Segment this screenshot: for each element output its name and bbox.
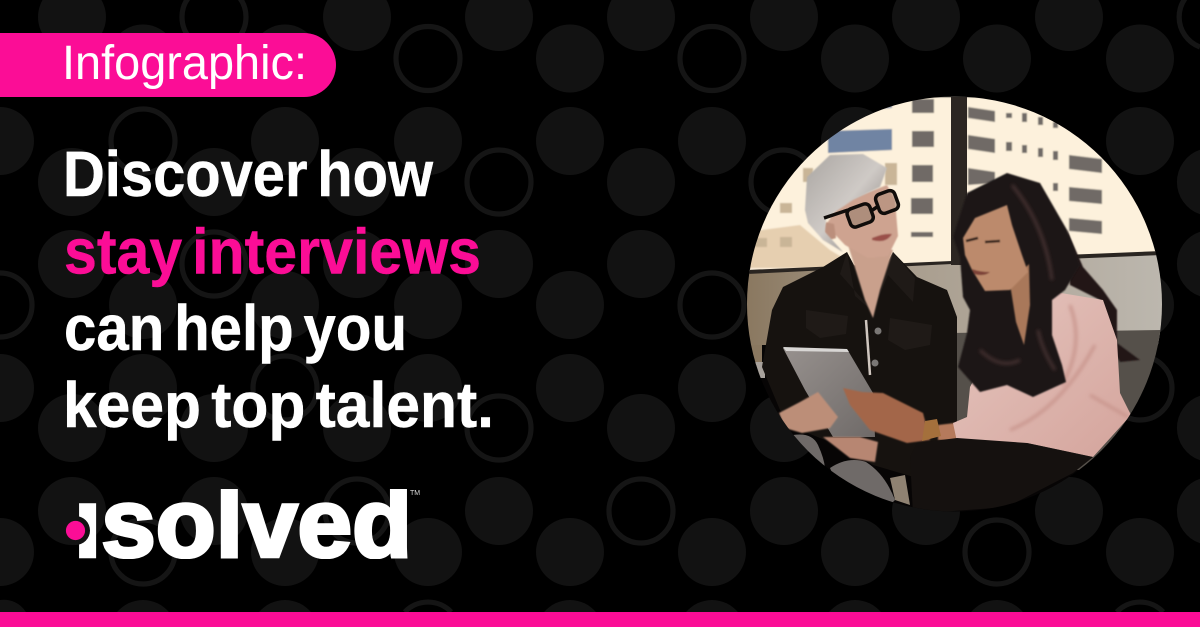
headline [63,138,494,441]
window with city buildings [747,96,1162,272]
blouse folds [1010,305,1128,430]
logo pink dot [66,521,85,540]
woman right: hair strand behind shoulder [1067,230,1140,362]
headline line 1: Discover how [63,138,433,210]
headline line 2: highlighted: stay interviews [64,216,481,288]
photo: two women reviewing a tablet [747,96,1162,514]
tablet [783,347,875,437]
woman right: black pants [910,438,1093,514]
label text: Infographic: [62,37,307,90]
isolved logo [66,489,420,559]
headline line 3: can help you [64,292,407,364]
glasses [824,189,900,229]
logo wordmark: isolved [74,468,412,578]
woman left: silver hair [805,154,887,252]
woman right: neck and face [963,205,1030,345]
watch [922,419,941,441]
trademark: TM [410,490,420,497]
woman right: dark hair [953,173,1080,397]
headline line 4: keep top talent. [63,369,494,441]
pink bottom bar [0,612,1200,627]
logo notch [61,516,90,545]
gray pants [793,434,910,505]
woman left: jacket [762,252,957,478]
wall and window frame [747,254,1162,345]
pink label pill [0,33,336,97]
hands [779,388,957,462]
sofa [950,330,1162,470]
woman right: blouse [953,292,1131,457]
woman left: neck and face [824,185,898,318]
jacket collar and buttons [806,252,932,375]
hair highlight strands [980,185,1055,370]
tan wall below window at left [751,345,762,365]
